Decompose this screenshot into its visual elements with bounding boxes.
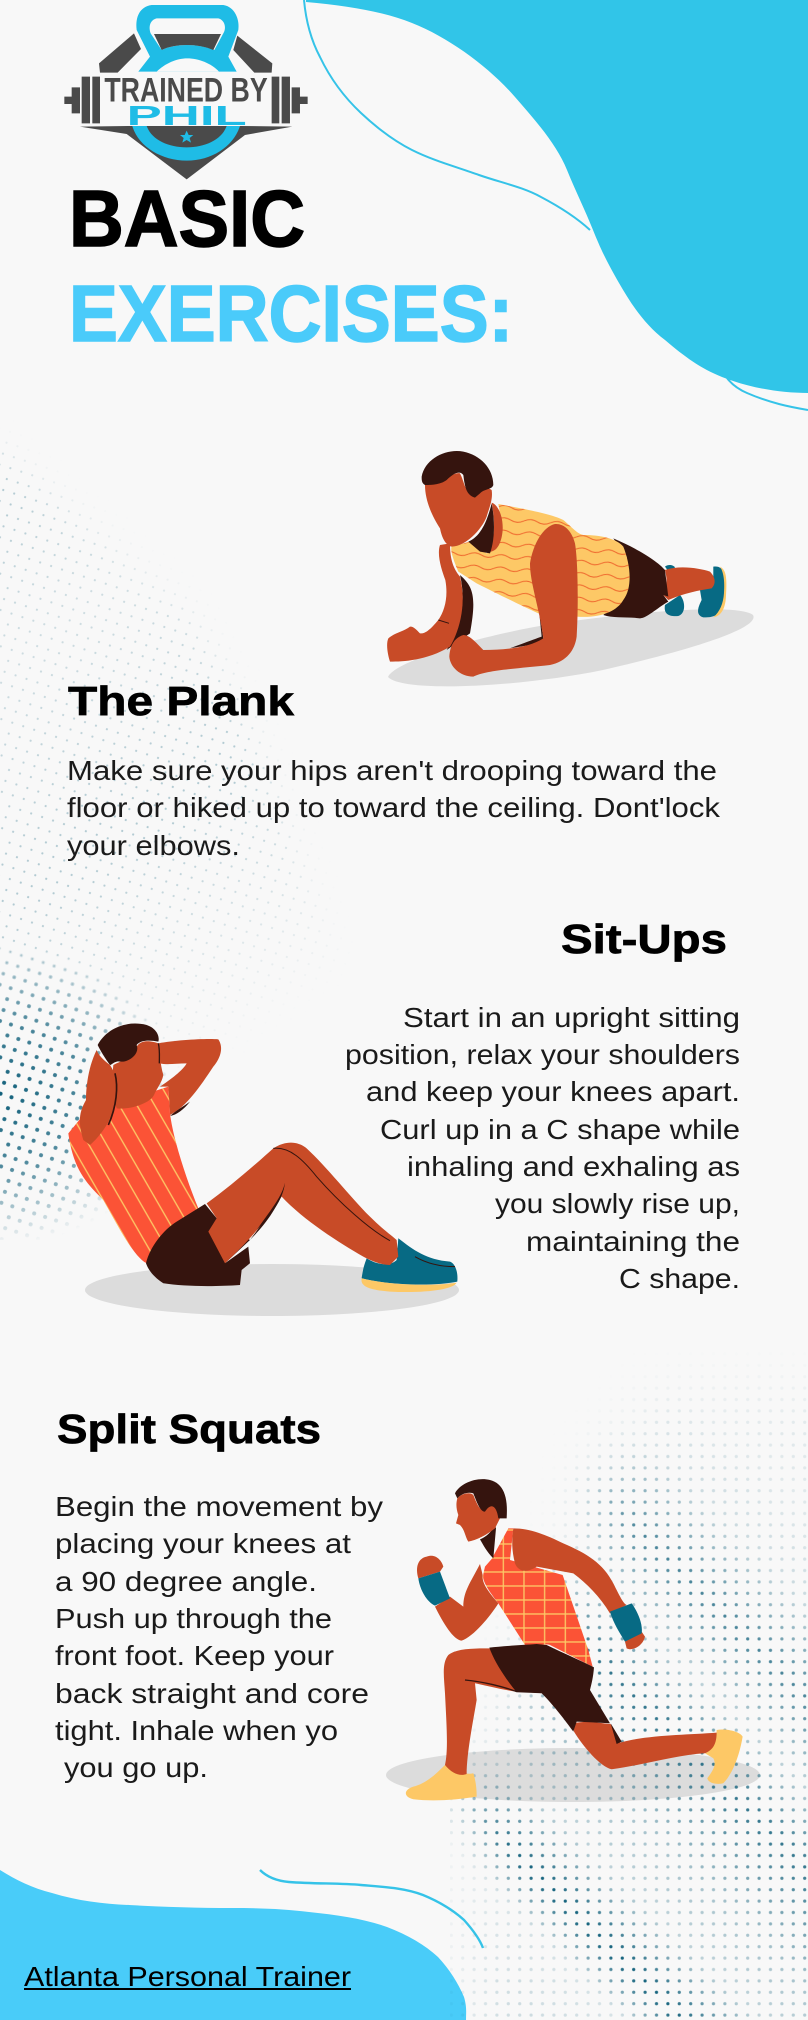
squats line 3: a 90 degree angle. [55,1566,317,1597]
squats line 2: placing your knees at [55,1528,351,1559]
plank line 3: your elbows. [67,830,240,861]
sit-ups line 5: inhaling and exhaling as [407,1151,740,1182]
section: split squats [55,1406,383,1783]
heading: split squats: Split Squats [57,1406,321,1452]
logo wordmark bottom: PHIL [127,100,247,131]
sit-ups line 1: Start in an upright sitting [403,1002,740,1033]
plank line 2: floor or hiked up to toward the ceiling. Dont'lock [67,792,721,823]
title line 1: BASIC [69,174,305,263]
illustration: man holding plank [387,451,726,677]
heading: the plank: The Plank [68,678,294,724]
sit-ups floor shadow [85,1264,459,1316]
section: the plank [67,678,721,861]
sit-ups line 2: position, relax your shoulders [345,1039,740,1070]
sit-ups line 4: Curl up in a C shape while [380,1114,740,1145]
logo star [180,131,193,143]
plank line 1: Make sure your hips aren't drooping toward the [67,755,717,786]
split squats floor shadow [386,1748,760,1802]
heading: sit-ups: Sit-Ups [561,916,727,962]
illustration: man doing sit-up [68,1024,457,1292]
footer link: Atlanta Personal Trainer [24,1961,351,1992]
logo: Trained by Phil [64,5,308,179]
section: sit-ups [345,916,740,1294]
bottom-left blue wave [0,1870,483,2020]
sit-ups line 3: and keep your knees apart. [366,1076,740,1107]
squats line 1: Begin the movement by [55,1491,383,1522]
sit-ups line 8: C shape. [619,1263,740,1294]
squats line 8: you go up. [64,1752,208,1783]
squats line 6: back straight and core [55,1678,369,1709]
top-right blue wave [304,0,808,410]
squats line 5: front foot. Keep your [55,1640,334,1671]
halftone dots: left [0,442,328,1240]
illustration: man doing split squat [406,1479,743,1800]
squats line 7: tight. Inhale when yo [55,1715,338,1746]
sit-ups line 7: maintaining the [526,1226,740,1257]
logo wordmark top: TRAINED BY [104,71,268,109]
title [69,174,513,358]
sit-ups line 6: you slowly rise up, [495,1188,740,1219]
halftone dots: bottom right [450,1350,808,2020]
title line 2: EXERCISES: [69,269,513,358]
squats line 4: Push up through the [55,1603,332,1634]
plank floor shadow [388,609,754,686]
